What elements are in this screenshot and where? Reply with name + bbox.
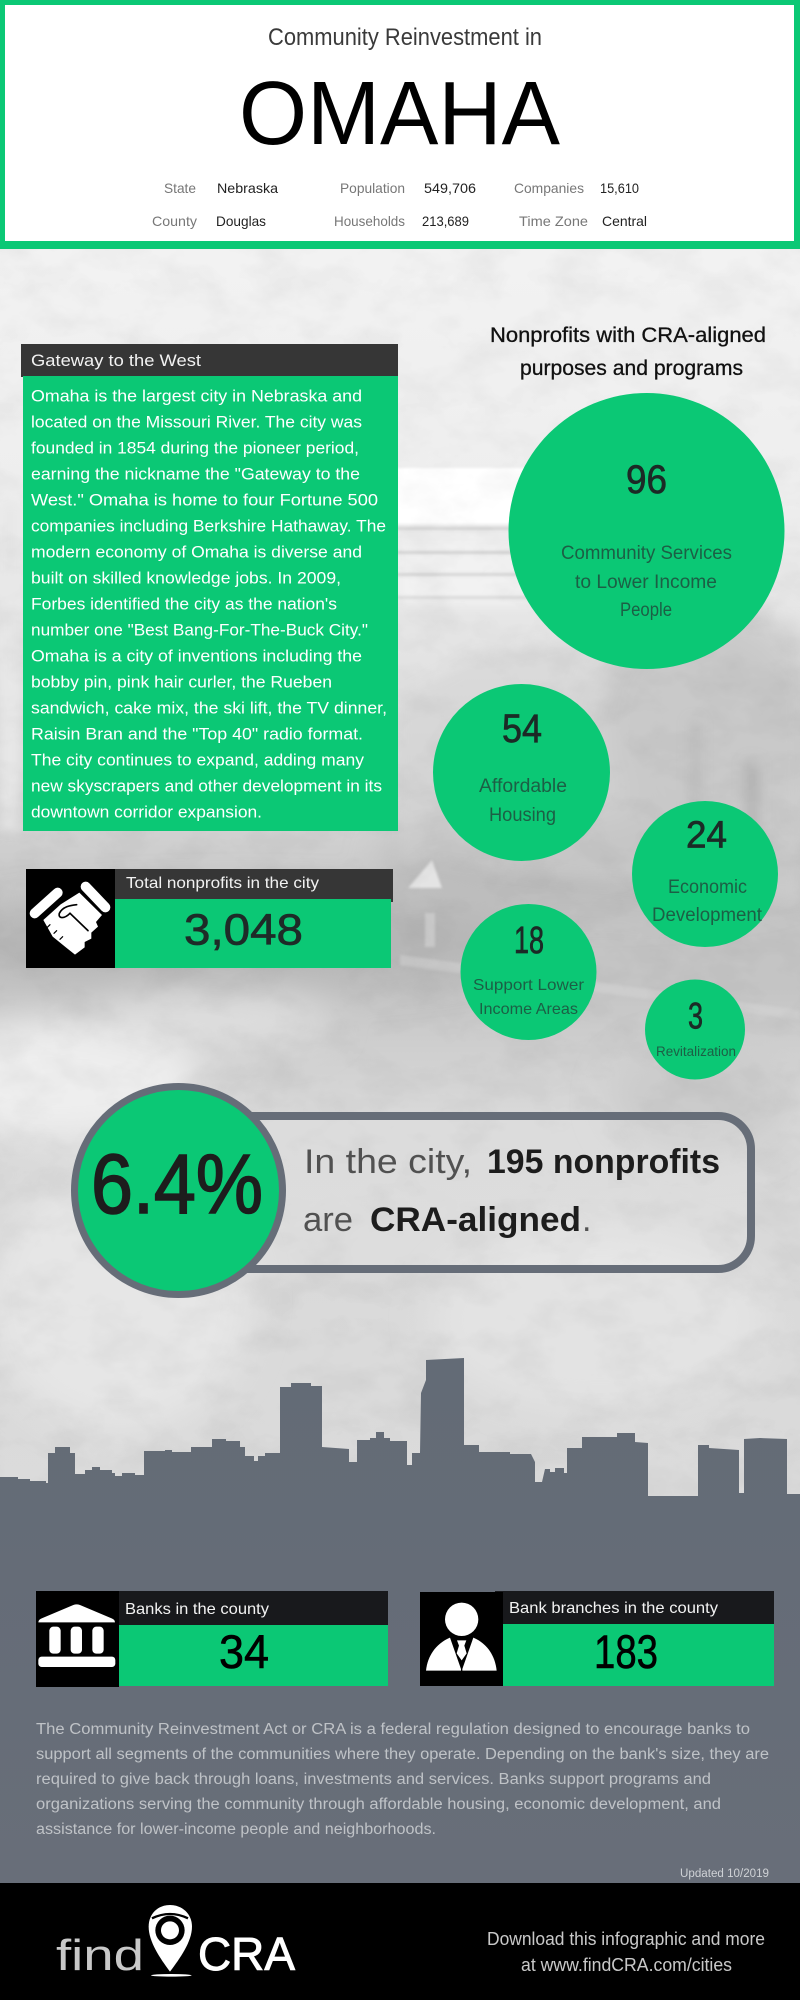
panel body text: built on skilled knowledge jobs. In 2009,	[31, 570, 341, 588]
city facts: Companies	[514, 180, 584, 196]
bubble: support lower income areas: Income Areas	[479, 1001, 578, 1018]
panel: gateway to the west	[21, 344, 398, 831]
city facts: County	[152, 213, 197, 229]
panel body text: West." Omaha is home to four Fortune 500	[31, 492, 378, 510]
label: Banks in the county	[125, 1601, 269, 1618]
panel body text: Forbes identified the city as the nation's	[31, 596, 337, 614]
bubble: economic development	[632, 801, 778, 947]
logo: findCRA	[56, 1905, 295, 1980]
bubble: economic development: Economic	[668, 877, 747, 898]
panel body text: downtown corridor expansion.	[31, 804, 262, 822]
text block: about the CRA: required to give back through loans, investments and services. Banks support programs and	[36, 1771, 711, 1788]
title line: Community Reinvestment in	[268, 24, 542, 51]
panel body text: Omaha is the largest city in Nebraska and	[31, 388, 362, 406]
bubble: revitalization	[645, 980, 745, 1080]
bubble: revitalization: Revitalization	[656, 1044, 736, 1059]
bubble: support lower income areas	[460, 904, 596, 1040]
callout text	[303, 1143, 720, 1239]
panel body text	[31, 388, 387, 822]
panel body text: Raisin Bran and the "Top 40" radio format.	[31, 726, 363, 744]
panel body text: Omaha is a city of inventions including the	[31, 648, 362, 666]
city facts: Population	[340, 180, 405, 196]
city facts: Nebraska	[217, 180, 278, 196]
bubble: community services	[508, 393, 784, 669]
city facts	[152, 180, 647, 229]
callout text: are	[303, 1201, 353, 1239]
label: Bank branches in the county	[509, 1600, 718, 1617]
panel body text: earning the nickname the "Gateway to the	[31, 466, 360, 484]
bubble: community services: Community Services	[561, 543, 732, 564]
updated note: Updated 10/2019	[680, 1868, 769, 1880]
callout text: 195 nonprofits	[487, 1143, 720, 1181]
download text: at www.findCRA.com/cities	[521, 1955, 732, 1975]
download text	[487, 1929, 765, 1975]
panel body text: companies including Berkshire Hathaway. The	[31, 518, 386, 536]
panel body text: modern economy of Omaha is diverse and	[31, 544, 362, 562]
city facts: Douglas	[216, 213, 266, 229]
city facts: 213,689	[422, 213, 469, 229]
heading: nonprofits with CRA-aligned purposes: Nonprofits with CRA-aligned	[490, 324, 766, 347]
panel body text: founded in 1854 during the pioneer period,	[31, 440, 359, 458]
icon: map pin	[149, 1905, 192, 1977]
panel body text: The city continues to expand, adding many	[31, 752, 365, 770]
panel body text: sandwich, cake mix, the ski lift, the TV dinner,	[31, 700, 387, 718]
bubble: support lower income areas: Support Lower	[473, 977, 585, 994]
bubble: community services: People	[620, 600, 672, 621]
bubble: revitalization: 3	[688, 996, 703, 1036]
text block: about the CRA: assistance for lower-income people and neighborhoods.	[36, 1821, 436, 1838]
stat card: total nonprofits	[26, 869, 393, 968]
download text: Download this infographic and more	[487, 1929, 765, 1949]
text block: about the CRA	[36, 1721, 769, 1838]
panel body text: new skyscrapers and other development in its	[31, 778, 382, 796]
city facts: 549,706	[424, 180, 476, 196]
icon: bank building	[38, 1604, 115, 1667]
panel body text: located on the Missouri River. The city was	[31, 414, 362, 432]
stat card: bank branches in the county	[420, 1591, 774, 1686]
percentage: 6.4%	[91, 1137, 263, 1231]
background photo: blurred city street	[0, 249, 800, 1509]
callout: 6.4 percent CRA-aligned	[74, 1086, 751, 1294]
stat card: banks in the county	[36, 1591, 388, 1687]
bubble: support lower income areas: 18	[514, 920, 544, 962]
city facts: Households	[334, 213, 405, 229]
footer	[0, 1883, 800, 2000]
value: 3,048	[184, 906, 303, 954]
city facts: State	[164, 180, 196, 196]
bubble: affordable housing	[433, 684, 610, 861]
logo: findCRA: find	[56, 1931, 144, 1980]
callout text: .	[582, 1201, 591, 1239]
text block: about the CRA: organizations serving the community through affordable housing, economic development, and	[36, 1796, 721, 1813]
city facts: Time Zone	[519, 213, 588, 229]
panel heading: Gateway to the West	[31, 351, 201, 370]
bubble: economic development: Development	[652, 905, 763, 926]
bubble: affordable housing: Housing	[489, 805, 556, 826]
skyline silhouette	[0, 1358, 800, 1884]
icon: handshake	[35, 887, 105, 955]
bubble: community services: to Lower Income	[575, 572, 717, 593]
bubble: community services: 96	[626, 458, 667, 502]
bubble: economic development: 24	[686, 814, 727, 856]
panel body text: bobby pin, pink hair curler, the Rueben	[31, 674, 332, 692]
logo: findCRA: CRA	[198, 1928, 295, 1980]
panel body text: number one "Best Bang-For-The-Buck City."	[31, 622, 368, 640]
heading: nonprofits with CRA-aligned purposes: purposes and programs	[520, 357, 743, 380]
label: Total nonprofits in the city	[126, 875, 319, 892]
city facts: Central	[602, 213, 647, 229]
value: 34	[219, 1625, 269, 1678]
text block: about the CRA: support all segments of the communities where they operate. Depending on the bank's size, they are	[36, 1746, 769, 1763]
bubble: affordable housing: 54	[502, 707, 542, 751]
heading: nonprofits with CRA-aligned purposes	[490, 324, 766, 380]
callout text: CRA-aligned	[370, 1201, 581, 1239]
city name: OMAHA	[239, 64, 560, 164]
city facts: 15,610	[600, 180, 639, 196]
bubble: affordable housing: Affordable	[479, 776, 567, 797]
callout text: In the city,	[304, 1143, 472, 1181]
header panel	[0, 0, 800, 249]
text block: about the CRA: The Community Reinvestment Act or CRA is a federal regulation designed to encourage banks to	[36, 1721, 750, 1738]
value: 183	[594, 1625, 658, 1678]
icon: businessperson	[426, 1603, 497, 1671]
